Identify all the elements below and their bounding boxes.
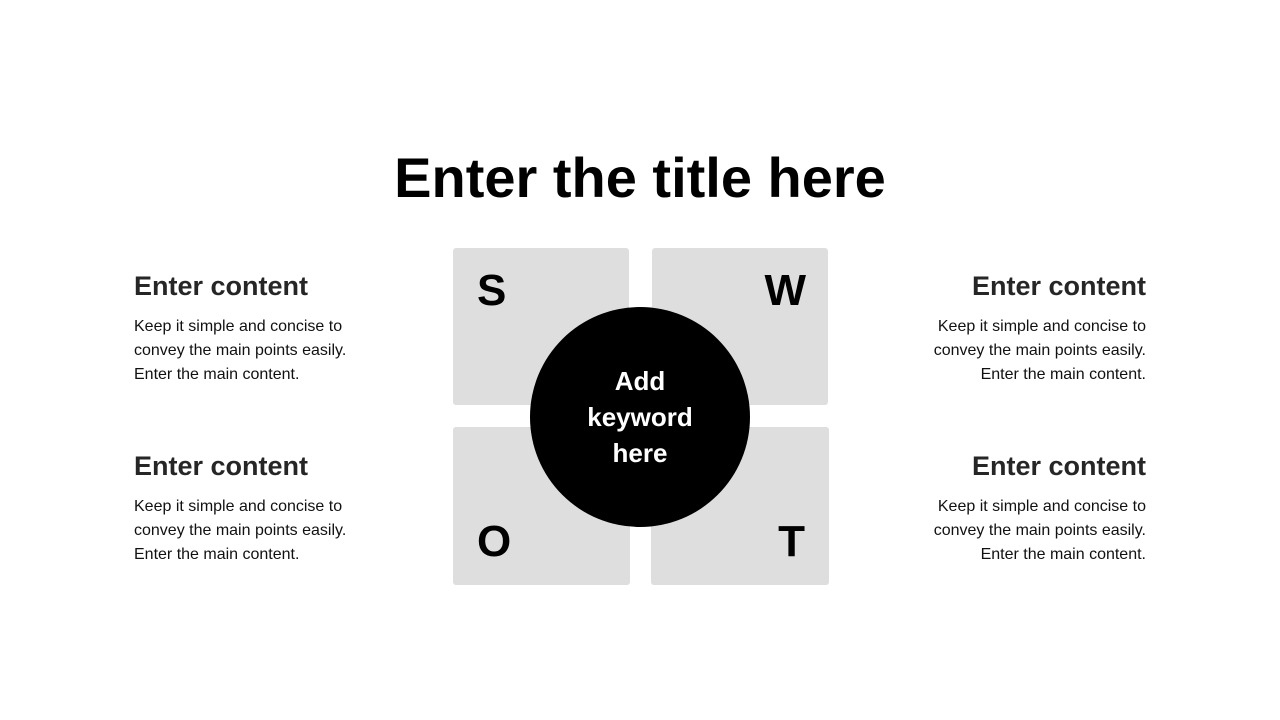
text block: bottom right: Keep it simple and concise to convey the main points easily. Enter the main content. — [934, 498, 1146, 563]
text block: top left — [134, 271, 346, 383]
box: W — [652, 248, 828, 405]
text block: bottom left — [134, 451, 346, 563]
text block: top left: Enter content — [134, 271, 308, 301]
box: S — [453, 248, 629, 405]
text block: top right: Keep it simple and concise to convey the main points easily. Enter the main content. — [934, 318, 1146, 383]
title: Enter the title here — [394, 146, 886, 209]
text block: bottom left: Enter content — [134, 451, 308, 481]
text block: top right: Enter content — [972, 271, 1146, 301]
text block: top right — [934, 271, 1146, 383]
box: O: O — [477, 517, 511, 566]
center circle keyword: Add — [615, 366, 665, 396]
center circle keyword: keyword — [587, 402, 693, 432]
box: O — [453, 427, 630, 585]
text block: bottom right — [934, 451, 1146, 563]
text block: top left: Keep it simple and concise to convey the main points easily. Enter the main content. — [134, 318, 346, 383]
center circle keyword — [530, 307, 750, 527]
text block: bottom right: Enter content — [972, 451, 1146, 481]
center circle keyword: here — [613, 438, 667, 468]
text block: bottom left: Keep it simple and concise to convey the main points easily. Enter the main content. — [134, 498, 346, 563]
box: S: S — [477, 266, 506, 315]
box: T: T — [778, 517, 805, 566]
box: T — [651, 427, 829, 585]
box: W: W — [764, 266, 806, 315]
